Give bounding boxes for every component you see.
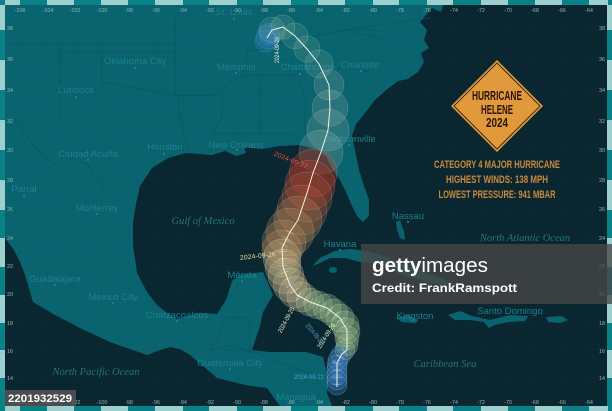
sign diamond: [451, 60, 543, 152]
bottom longitude labels: -102: [69, 400, 81, 406]
watermark logo: gettyimages: [372, 255, 488, 277]
label: Guadalajara: Guadalajara: [29, 274, 82, 285]
top longitude labels: -86: [287, 8, 295, 14]
left latitude labels: 16: [7, 349, 13, 355]
right latitude labels: 32: [599, 119, 605, 125]
watermark panel: [361, 244, 612, 304]
top longitude labels: -64: [585, 8, 593, 14]
label: North Pacific Ocean: North Pacific Ocean: [52, 367, 139, 378]
bottom longitude labels: -68: [531, 400, 539, 406]
bottom longitude labels: -82: [342, 400, 350, 406]
top longitude labels: -96: [152, 8, 160, 14]
left latitude labels: 20: [7, 292, 13, 298]
label: Nassau: Nassau: [392, 211, 424, 222]
top longitude labels: -100: [96, 8, 108, 14]
bottom longitude labels: -88: [260, 400, 268, 406]
track hour ticks: [282, 232, 347, 387]
red circles: peak intensity at landfall: [285, 149, 337, 210]
bottom longitude labels: -100: [96, 400, 108, 406]
left latitude labels: 14: [7, 376, 13, 382]
date: 2024-09-27: 2024-09-27: [273, 151, 309, 171]
pale circles: Tennessee, Georgia, Carolinas: [259, 15, 333, 78]
label: Santo Domingo: Santo Domingo: [477, 306, 543, 317]
date: 2024-09-22: 2024-09-22: [294, 374, 324, 381]
left latitude labels: 32: [7, 119, 13, 125]
label: Monterrey: Monterrey: [76, 203, 119, 214]
date: 2024-09-25: 2024-09-25: [277, 306, 296, 334]
hurricane statistics: [434, 159, 560, 201]
right latitude labels: 38: [599, 26, 605, 32]
state and country borders: [5, 15, 430, 378]
label: Oklahoma City: Oklahoma City: [104, 56, 166, 67]
bottom longitude labels: -78: [396, 400, 404, 406]
label: St. Louis: St. Louis: [216, 7, 253, 18]
left latitude labels: 22: [7, 264, 13, 270]
top longitude labels: [14, 8, 593, 14]
right latitude labels: 20: [599, 292, 605, 298]
right latitude labels: 18: [599, 321, 605, 327]
label: Jacksonville: Jacksonville: [324, 134, 376, 145]
hurricane warning sign: HELENE: [481, 103, 513, 117]
bottom longitude labels: -76: [423, 400, 431, 406]
label: Ciudad Acuna: Ciudad Acuña: [58, 149, 118, 160]
bottom longitude labels: -66: [558, 400, 566, 406]
right latitude labels: 36: [599, 57, 605, 63]
top longitude labels: -70: [504, 8, 512, 14]
blue circles: genesis in the Caribbean: [327, 345, 351, 395]
top longitude labels: -92: [206, 8, 214, 14]
top longitude labels: -82: [342, 8, 350, 14]
label: Merida: Mérida: [227, 270, 257, 281]
label: Mexico City: Mexico City: [88, 292, 138, 303]
label: Lubbock: Lubbock: [58, 85, 94, 96]
bottom longitude labels: -74: [450, 400, 458, 406]
sign text: HURRICANE: [472, 89, 522, 103]
label: Charlotte: Charlotte: [341, 60, 379, 71]
label: Chattanooga: Chattanooga: [281, 62, 336, 73]
label: Managua: Managua: [276, 392, 317, 403]
top longitude labels: -76: [423, 8, 431, 14]
bottom longitude labels: -90: [233, 400, 241, 406]
panel background: [361, 244, 612, 304]
bottom longitude labels: -104: [42, 400, 54, 406]
hurricane statistics: HIGHEST WINDS: 138 MPH: [446, 174, 548, 186]
bottom longitude labels: -92: [206, 400, 214, 406]
watermark credit: Credit: FrankRamspott: [372, 283, 517, 295]
badge number: 2201932529: [8, 393, 72, 405]
bottom longitude labels: [14, 400, 593, 406]
label: New Orleans: New Orleans: [209, 140, 264, 151]
bottom longitude labels: -84: [315, 400, 323, 406]
ocean: Atlantic, Gulf of Mexico and Caribbean: [133, 5, 607, 406]
left latitude labels: 18: [7, 321, 13, 327]
right latitude labels: 26: [599, 207, 605, 213]
top longitude labels: -78: [396, 8, 404, 14]
green circles: northwest Caribbean: [296, 288, 360, 360]
left latitude labels: 24: [7, 236, 13, 242]
track date labels: [240, 37, 337, 381]
hurricane statistics: LOWEST PRESSURE: 941 MBAR: [438, 189, 556, 201]
bottom longitude labels: -96: [152, 400, 160, 406]
date: 2024-09-23: 2024-09-23: [304, 323, 325, 346]
right latitude labels: 16: [599, 349, 605, 355]
top longitude labels: -72: [477, 8, 485, 14]
label: Caribbean Sea: Caribbean Sea: [414, 359, 476, 370]
city markers: [23, 18, 409, 370]
bottom longitude labels: -80: [369, 400, 377, 406]
bottom longitude labels: -64: [585, 400, 593, 406]
ocean labels: [52, 216, 570, 378]
hurricane track line: [267, 27, 347, 387]
left latitude labels: 34: [7, 88, 13, 94]
right latitude labels: 14: [599, 376, 605, 382]
label: Kingston: Kingston: [397, 311, 433, 322]
label: Havana: Havana: [324, 239, 357, 250]
hurricane warning sign: 2024: [486, 116, 508, 130]
right latitude labels: [599, 26, 605, 382]
right latitude labels: 34: [599, 88, 605, 94]
label: Guatemala City: Guatemala City: [197, 358, 263, 369]
hurricane statistics: CATEGORY 4 MAJOR HURRICANE: [434, 159, 560, 171]
badge background: [5, 390, 76, 406]
islands: Cuba, Bahamas, Hispaniola, Jamaica, Puerto Rico: [312, 220, 568, 328]
blue circles: dissipation over Tennessee: [255, 23, 281, 52]
bottom longitude labels: -72: [477, 400, 485, 406]
date: 2024-09-26: 2024-09-26: [240, 251, 277, 262]
left latitude labels: [7, 26, 13, 382]
top longitude labels: -106: [14, 8, 26, 14]
left latitude labels: 38: [7, 26, 13, 32]
bottom longitude labels: -94: [179, 400, 187, 406]
right latitude labels: 28: [599, 178, 605, 184]
left latitude labels: 30: [7, 148, 13, 154]
orange circles: eastern Gulf: [262, 196, 322, 270]
label: North Atlantic Ocean: North Atlantic Ocean: [479, 233, 570, 244]
top longitude labels: -98: [125, 8, 133, 14]
bottom longitude labels: -98: [125, 400, 133, 406]
left latitude labels: 26: [7, 207, 13, 213]
ocean: North Pacific: [5, 238, 280, 406]
bottom longitude labels: -86: [287, 400, 295, 406]
hurricane track wind circles: [255, 15, 360, 395]
label: Memphis: Memphis: [217, 62, 256, 73]
top longitude labels: -68: [531, 8, 539, 14]
top longitude labels: -104: [42, 8, 54, 14]
top longitude labels: -94: [179, 8, 187, 14]
tan circles: southern Gulf: [263, 239, 317, 312]
left latitude labels: 28: [7, 178, 13, 184]
top longitude labels: -66: [558, 8, 566, 14]
image id badge: [5, 390, 76, 406]
top longitude labels: -84: [315, 8, 323, 14]
label: Parral: Parral: [11, 184, 37, 195]
top longitude labels: -88: [260, 8, 268, 14]
right latitude labels: 30: [599, 148, 605, 154]
right latitude labels: 24: [599, 236, 605, 242]
date: 2024-09-28: 2024-09-28: [274, 37, 281, 63]
hurricane warning sign: [451, 60, 543, 152]
left latitude labels: 36: [7, 57, 13, 63]
label: Houston: Houston: [147, 142, 183, 153]
top longitude labels: -80: [369, 8, 377, 14]
right latitude labels: 22: [599, 264, 605, 270]
date: 2024-09-24: 2024-09-24: [316, 322, 337, 350]
label: Gulf of Mexico: Gulf of Mexico: [172, 216, 234, 227]
top longitude labels: -74: [450, 8, 458, 14]
top longitude labels: -90: [233, 8, 241, 14]
top longitude labels: -102: [69, 8, 81, 14]
bottom longitude labels: -106: [14, 400, 26, 406]
label: Coatzacoalcos: Coatzacoalcos: [146, 310, 208, 321]
bottom longitude labels: -70: [504, 400, 512, 406]
